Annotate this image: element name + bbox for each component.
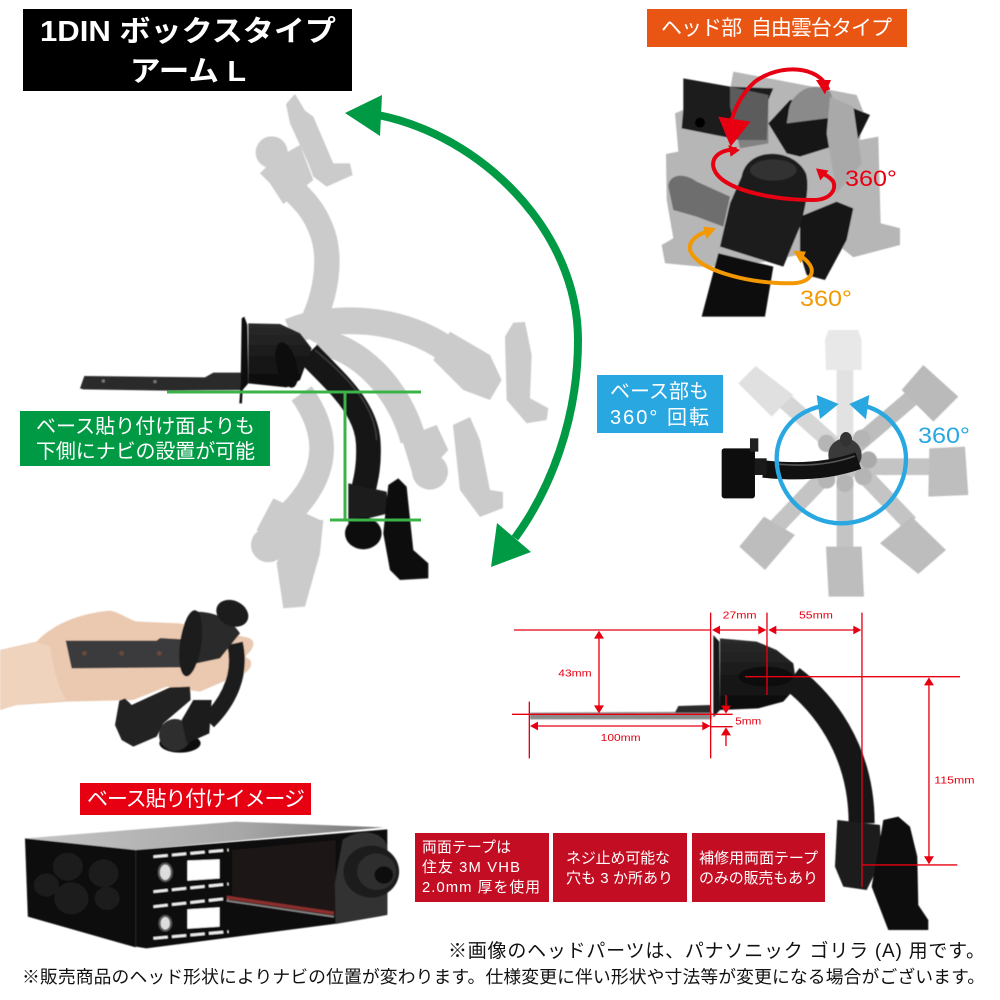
red heading: base attachment (80, 783, 311, 815)
title (23, 9, 352, 91)
tube (308, 353, 369, 490)
windows (187, 859, 220, 881)
white panel lines (154, 850, 228, 938)
title: アーム L (130, 56, 246, 88)
side view arm (530, 635, 928, 930)
side ribs (34, 853, 120, 914)
orange heading: ヘッド部 自由雲台タイプ (661, 17, 892, 40)
arm stem (702, 253, 773, 317)
ghost arms: range of motion (256, 94, 548, 423)
info box: spare tape (692, 833, 825, 902)
blue callout: 360° 回転 (610, 406, 709, 429)
dimension labels: 43mm (558, 669, 592, 680)
side face (25, 838, 136, 947)
red arrowheads (530, 626, 934, 864)
dimension labels (558, 611, 975, 786)
red swivel arrow (713, 145, 834, 200)
head and holder (348, 483, 388, 523)
knob (212, 595, 253, 632)
ghost arm: raised (256, 94, 353, 337)
red dimension lines (512, 613, 960, 887)
info box: tape (415, 833, 549, 902)
green sweep arrow (345, 95, 578, 567)
label: 360 orange: 360° (800, 286, 852, 311)
ghost arm: horizontal (290, 321, 548, 423)
ghost holder (662, 72, 900, 267)
dimension labels: 27mm (723, 611, 757, 622)
cup (195, 612, 240, 663)
1DIN box photo (25, 822, 399, 948)
base flange (239, 317, 248, 403)
base rotation figure (722, 330, 968, 597)
dark holder top left (682, 78, 773, 140)
hand holding arm photo (0, 595, 254, 753)
footnote 1: ※画像のヘッドパーツは、パナソニック ゴリラ (A) 用です。 (448, 940, 985, 962)
opening (232, 840, 336, 917)
blue rotation arrow (777, 395, 906, 523)
info box: tape: 住友 3M VHB (422, 859, 520, 876)
dimension labels: 100mm (601, 733, 641, 744)
green callout: ベース貼り付け面よりも (36, 415, 255, 438)
dimension labels: 55mm (799, 611, 833, 622)
front face (136, 829, 387, 948)
label: 360 red: 360° (845, 166, 897, 191)
head photo with rotation arrows (662, 69, 900, 317)
ball joint (720, 154, 807, 267)
label: 360 blue: 360° (918, 423, 970, 448)
dimension labels: 5mm (735, 716, 761, 727)
base disc (175, 609, 206, 678)
knob (271, 340, 302, 390)
hand (0, 611, 254, 710)
dimension drawing (512, 611, 975, 930)
photo parts (662, 72, 900, 317)
green height guide lines (167, 392, 421, 520)
orange swivel arrow (690, 227, 812, 283)
cup (248, 323, 312, 387)
ghost arm: lowered left (251, 393, 323, 608)
dimension labels: 115mm (934, 775, 975, 786)
black arm on base (722, 432, 862, 498)
ghost arm: lowered right (317, 342, 503, 517)
tube (208, 643, 237, 722)
info box: spare tape: のみの販売もあり (699, 870, 818, 887)
tape strip (227, 897, 334, 913)
mounted base (335, 832, 387, 924)
info box: screw (553, 833, 687, 902)
green callout (20, 411, 270, 466)
wing knob (800, 202, 853, 280)
info box: tape: 2.0mm 厚を使用 (422, 879, 540, 896)
red heading: base attachment: ベース貼り付けイメージ (87, 788, 305, 811)
info box: screw: ネジ止め可能な (566, 850, 670, 867)
red tilt arrow (718, 69, 831, 147)
dark holder right (768, 100, 870, 157)
holder (115, 687, 191, 747)
info box: spare tape: 補修用両面テープ (699, 850, 818, 867)
info box: tape: 両面テープは (422, 839, 511, 856)
blue callout (597, 375, 723, 433)
title: 1DIN ボックスタイプ (40, 15, 336, 48)
orange heading (647, 9, 907, 47)
blue callout: ベース部も (610, 380, 709, 403)
mounting plate (80, 373, 242, 391)
green callout: 下側にナビの設置が可能 (36, 440, 255, 463)
left wing knob (668, 176, 730, 227)
main black arm (80, 317, 428, 580)
plate (66, 638, 186, 668)
info box: screw: 穴も 3 か所あり (566, 870, 673, 887)
footnote 2: ※販売商品のヘッド形状によりナビの位置が変わります。仕様変更に伴い形状や寸法等が変更になる場合がございます。 (22, 966, 985, 987)
top face (25, 822, 384, 850)
ghost spokes (738, 330, 968, 597)
